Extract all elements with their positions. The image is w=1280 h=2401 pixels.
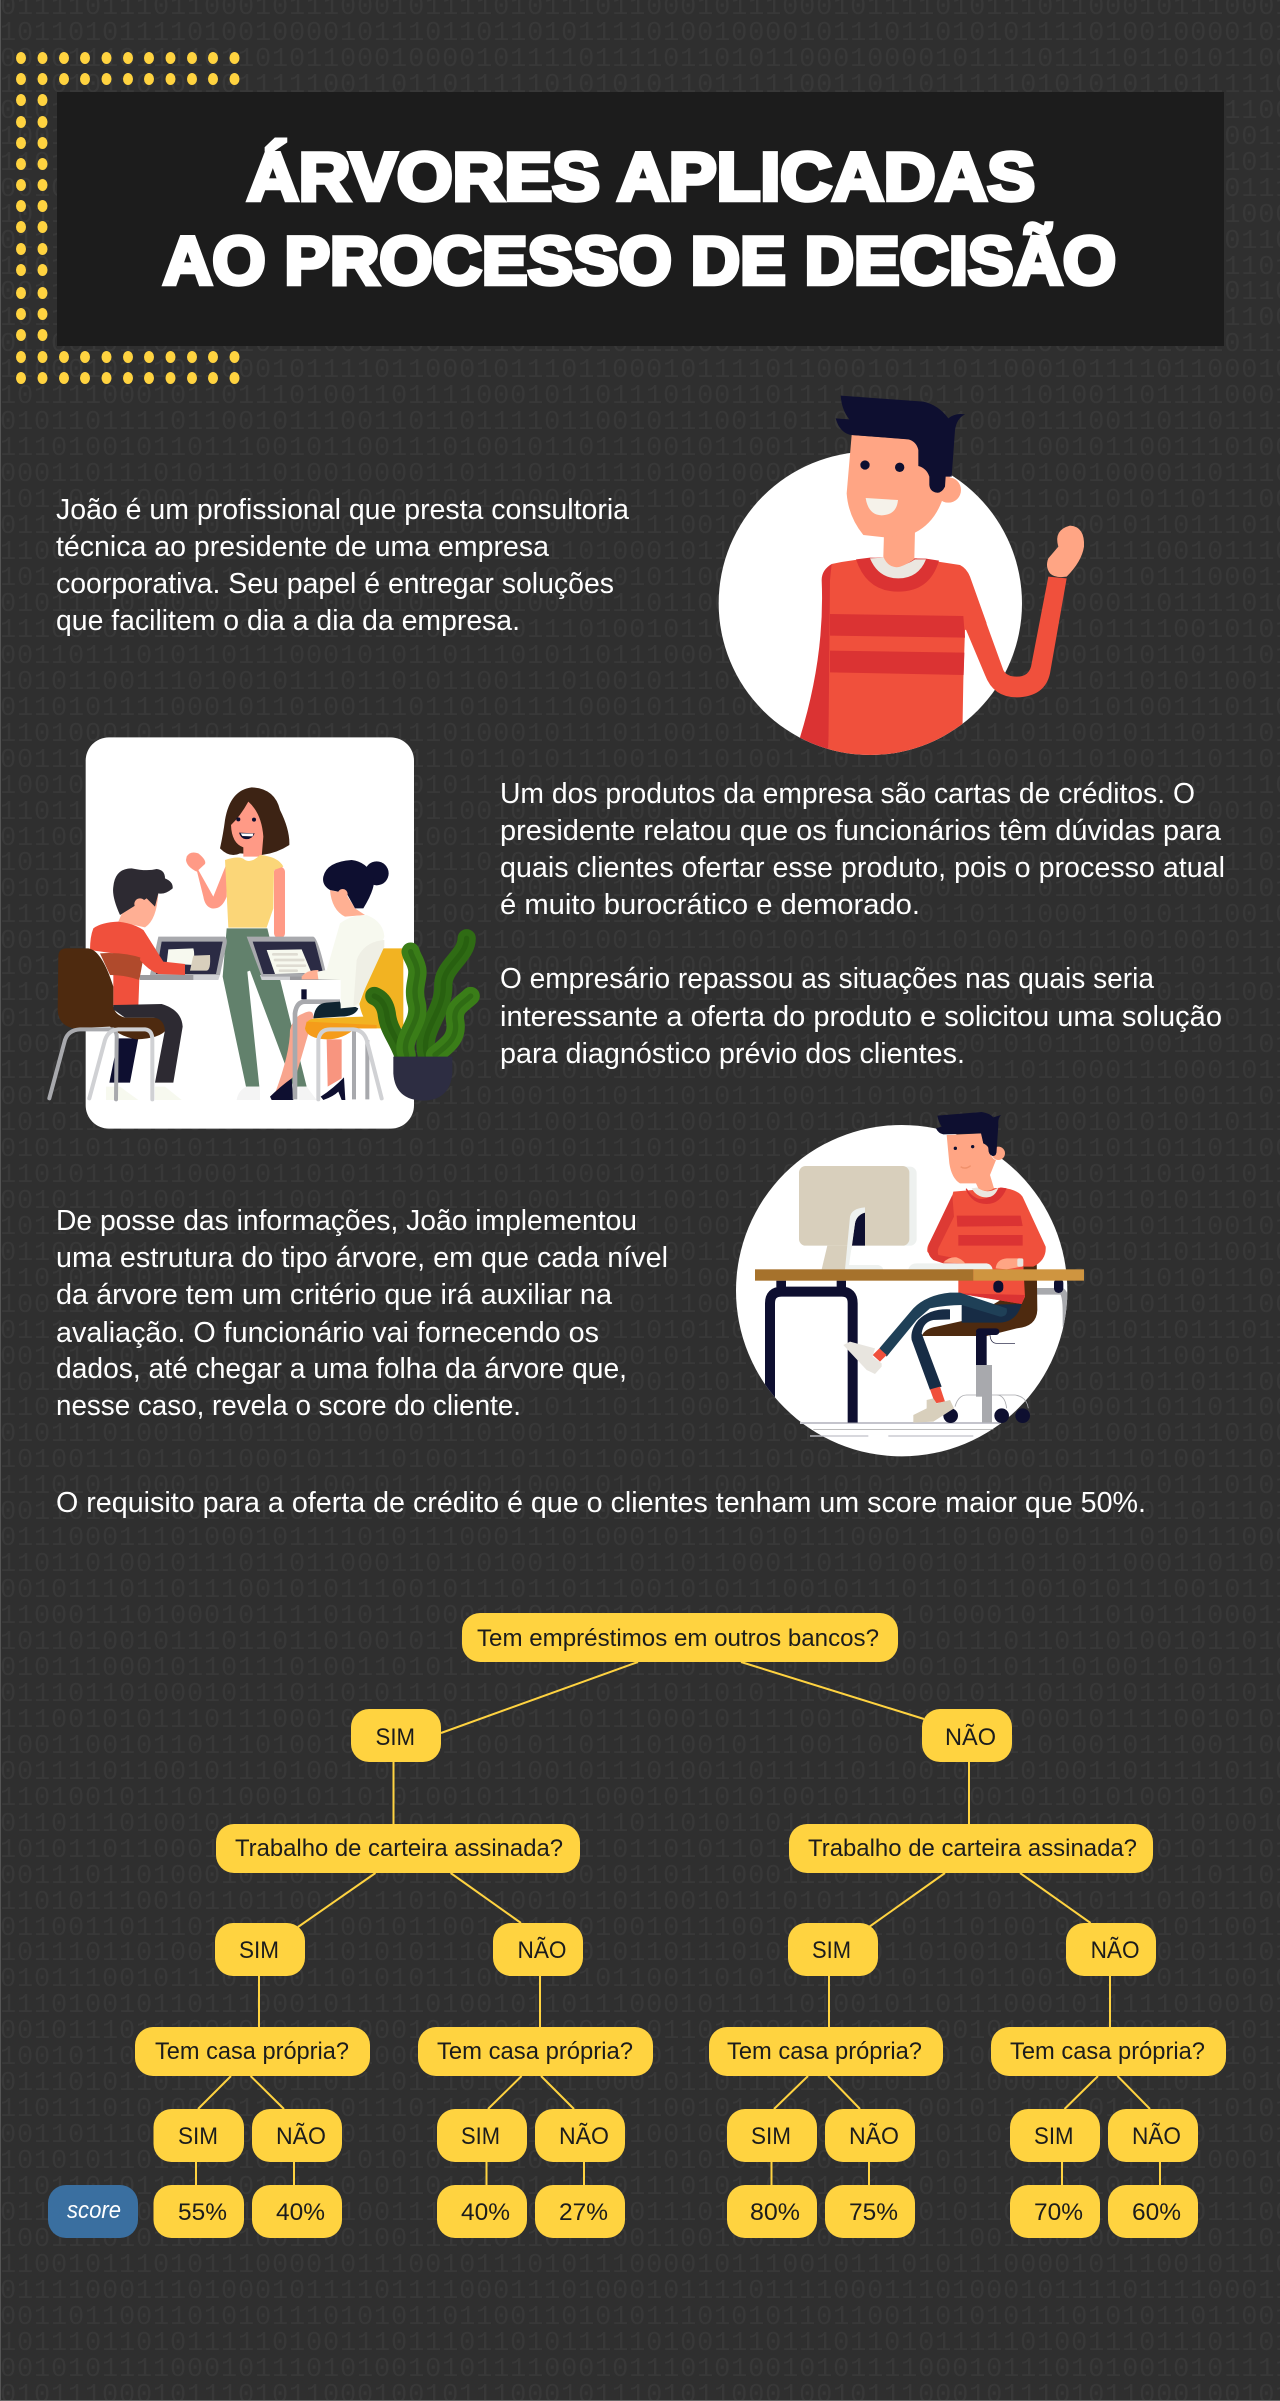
standing woman — [186, 787, 317, 1100]
decision tree — [48, 1613, 1226, 2238]
eyes — [860, 460, 904, 472]
node: casa própria 1: Tem casa própria? — [155, 2038, 349, 2065]
text block: solicitação do empresário: O empresário repassou as situações nas quais seria — [500, 963, 1155, 995]
desk legs — [770, 1278, 1066, 1423]
hand — [1047, 526, 1084, 577]
node: NÃO level 3a: NÃO — [518, 1937, 566, 1964]
person torso — [927, 1187, 1046, 1304]
left laptop — [140, 937, 227, 980]
answers row: SIM — [178, 2123, 218, 2150]
score leaves — [154, 2185, 1198, 2238]
hair — [836, 396, 965, 493]
text block: estrutura de árvore: nesse caso, revela o score do cliente. — [56, 1390, 521, 1422]
answers row: SIM — [461, 2123, 500, 2150]
answers row: NÃO — [559, 2123, 609, 2150]
node: casa própria 3 — [709, 2027, 943, 2076]
score leaves: 60% — [1132, 2199, 1181, 2226]
floor lines — [800, 1422, 1000, 1437]
node: NÃO level 3a — [493, 1923, 583, 1976]
illustration: waving man in circle — [719, 396, 1084, 757]
score leaves: 40% — [276, 2199, 325, 2226]
seated woman — [270, 860, 403, 1100]
node: SIM: SIM — [376, 1724, 415, 1751]
score leaves: 80% — [750, 2199, 800, 2226]
node: NÃO level 3b: NÃO — [1091, 1937, 1140, 1964]
node: SIM — [351, 1709, 441, 1762]
title: AO PROCESSO DE DECISÃO — [163, 223, 1116, 299]
illustration: man at desk in circle — [736, 1112, 1084, 1456]
text block: intro João: que facilitem o dia a dia da empresa. — [56, 605, 520, 637]
text block: produto e problema — [500, 778, 1225, 921]
answers row: SIM — [751, 2123, 791, 2150]
head and neck — [847, 435, 961, 567]
person legs — [843, 1293, 1022, 1423]
text block: solicitação do empresário — [500, 963, 1222, 1070]
text block: estrutura de árvore: uma estrutura do tipo árvore, em que cada nível — [56, 1242, 668, 1274]
collar — [856, 558, 939, 592]
score legend — [48, 2185, 138, 2238]
tree connectors — [196, 1662, 1160, 2185]
text block: estrutura de árvore: da árvore tem um critério que irá auxiliar na — [56, 1279, 613, 1311]
node: NÃO — [922, 1709, 1012, 1762]
node: carteira assinada right: Trabalho de carteira assinada? — [808, 1835, 1137, 1862]
node: empréstimos: Tem empréstimos em outros bancos? — [477, 1625, 879, 1652]
text block: requisito: O requisito para a oferta de crédito é que o clientes tenham um score maior que 50%. — [56, 1487, 1146, 1519]
node: NÃO: NÃO — [945, 1724, 996, 1751]
title: ÁRVORES APLICADAS — [247, 139, 1035, 215]
text block: intro João: João é um profissional que presta consultoria — [56, 494, 630, 526]
torso — [800, 558, 987, 757]
node: casa própria 4: Tem casa própria? — [1010, 2038, 1205, 2065]
node: carteira assinada left — [216, 1824, 580, 1873]
arm of seated man over laptop — [140, 930, 185, 975]
score leaves: 70% — [1034, 2199, 1083, 2226]
node: carteira assinada right — [789, 1824, 1153, 1873]
text block: estrutura de árvore: De posse das informações, João implementou — [56, 1205, 637, 1237]
text block: intro João — [56, 494, 630, 637]
title panel — [57, 92, 1224, 346]
node: carteira assinada left: Trabalho de carteira assinada? — [235, 1835, 563, 1862]
node: SIM level 3b — [788, 1923, 878, 1976]
node: SIM level 3a — [215, 1923, 305, 1976]
score leaves: 55% — [178, 2199, 227, 2226]
keyboard and hands — [908, 1257, 1023, 1269]
text block: produto e problema: Um dos produtos da empresa são cartas de créditos. O — [500, 778, 1195, 810]
answers row: NÃO — [849, 2123, 899, 2150]
score legend: score — [67, 2197, 121, 2224]
node: empréstimos — [462, 1613, 898, 1662]
node: NÃO level 3b — [1066, 1923, 1156, 1976]
node: casa própria 4 — [991, 2027, 1226, 2076]
decorative dotted frame — [16, 52, 240, 384]
text block: solicitação do empresário: interessante a oferta do produto e solicitou uma solução — [500, 1001, 1222, 1033]
score leaves: 27% — [559, 2199, 608, 2226]
text block: intro João: coorporativa. Seu papel é entregar soluções — [56, 568, 614, 600]
person head — [936, 1112, 1005, 1191]
node: casa própria 1 — [135, 2027, 370, 2076]
text block: estrutura de árvore — [56, 1205, 668, 1422]
raised arm — [964, 573, 1067, 697]
monitor — [799, 1166, 917, 1270]
answers row: SIM — [1034, 2123, 1074, 2150]
seated man — [49, 868, 195, 1100]
score leaves: 40% — [461, 2199, 510, 2226]
text block: solicitação do empresário: para diagnóstico prévio dos clientes. — [500, 1038, 965, 1070]
node: casa própria 2 — [418, 2027, 653, 2076]
text block: estrutura de árvore: dados, até chegar a uma folha da árvore que, — [56, 1353, 627, 1385]
office chair — [922, 1233, 1037, 1423]
desk top — [755, 1269, 1084, 1293]
illustration: team at laptops — [49, 737, 471, 1129]
answers row: NÃO — [1132, 2123, 1181, 2150]
text block: produto e problema: quais clientes ofertar esse produto, pois o processo atual — [500, 852, 1225, 884]
potted plant — [374, 938, 471, 1101]
text block: produto e problema: presidente relatou que os funcionários têm dúvidas para — [500, 815, 1222, 847]
text block: estrutura de árvore: avaliação. O funcionário vai fornecendo os — [56, 1317, 599, 1349]
title — [163, 139, 1116, 299]
node: SIM level 3b: SIM — [812, 1937, 851, 1964]
node: casa própria 3: Tem casa própria? — [727, 2038, 922, 2065]
text block: intro João: técnica ao presidente de uma empresa — [56, 531, 550, 563]
smile — [866, 498, 898, 515]
score leaves: 75% — [849, 2199, 898, 2226]
answers row — [154, 2109, 1198, 2162]
right laptop — [247, 937, 340, 980]
answers row: NÃO — [276, 2123, 326, 2150]
node: casa própria 2: Tem casa própria? — [437, 2038, 633, 2065]
text block: produto e problema: é muito burocrático e demorado. — [500, 889, 920, 921]
node: SIM level 3a: SIM — [239, 1937, 279, 1964]
